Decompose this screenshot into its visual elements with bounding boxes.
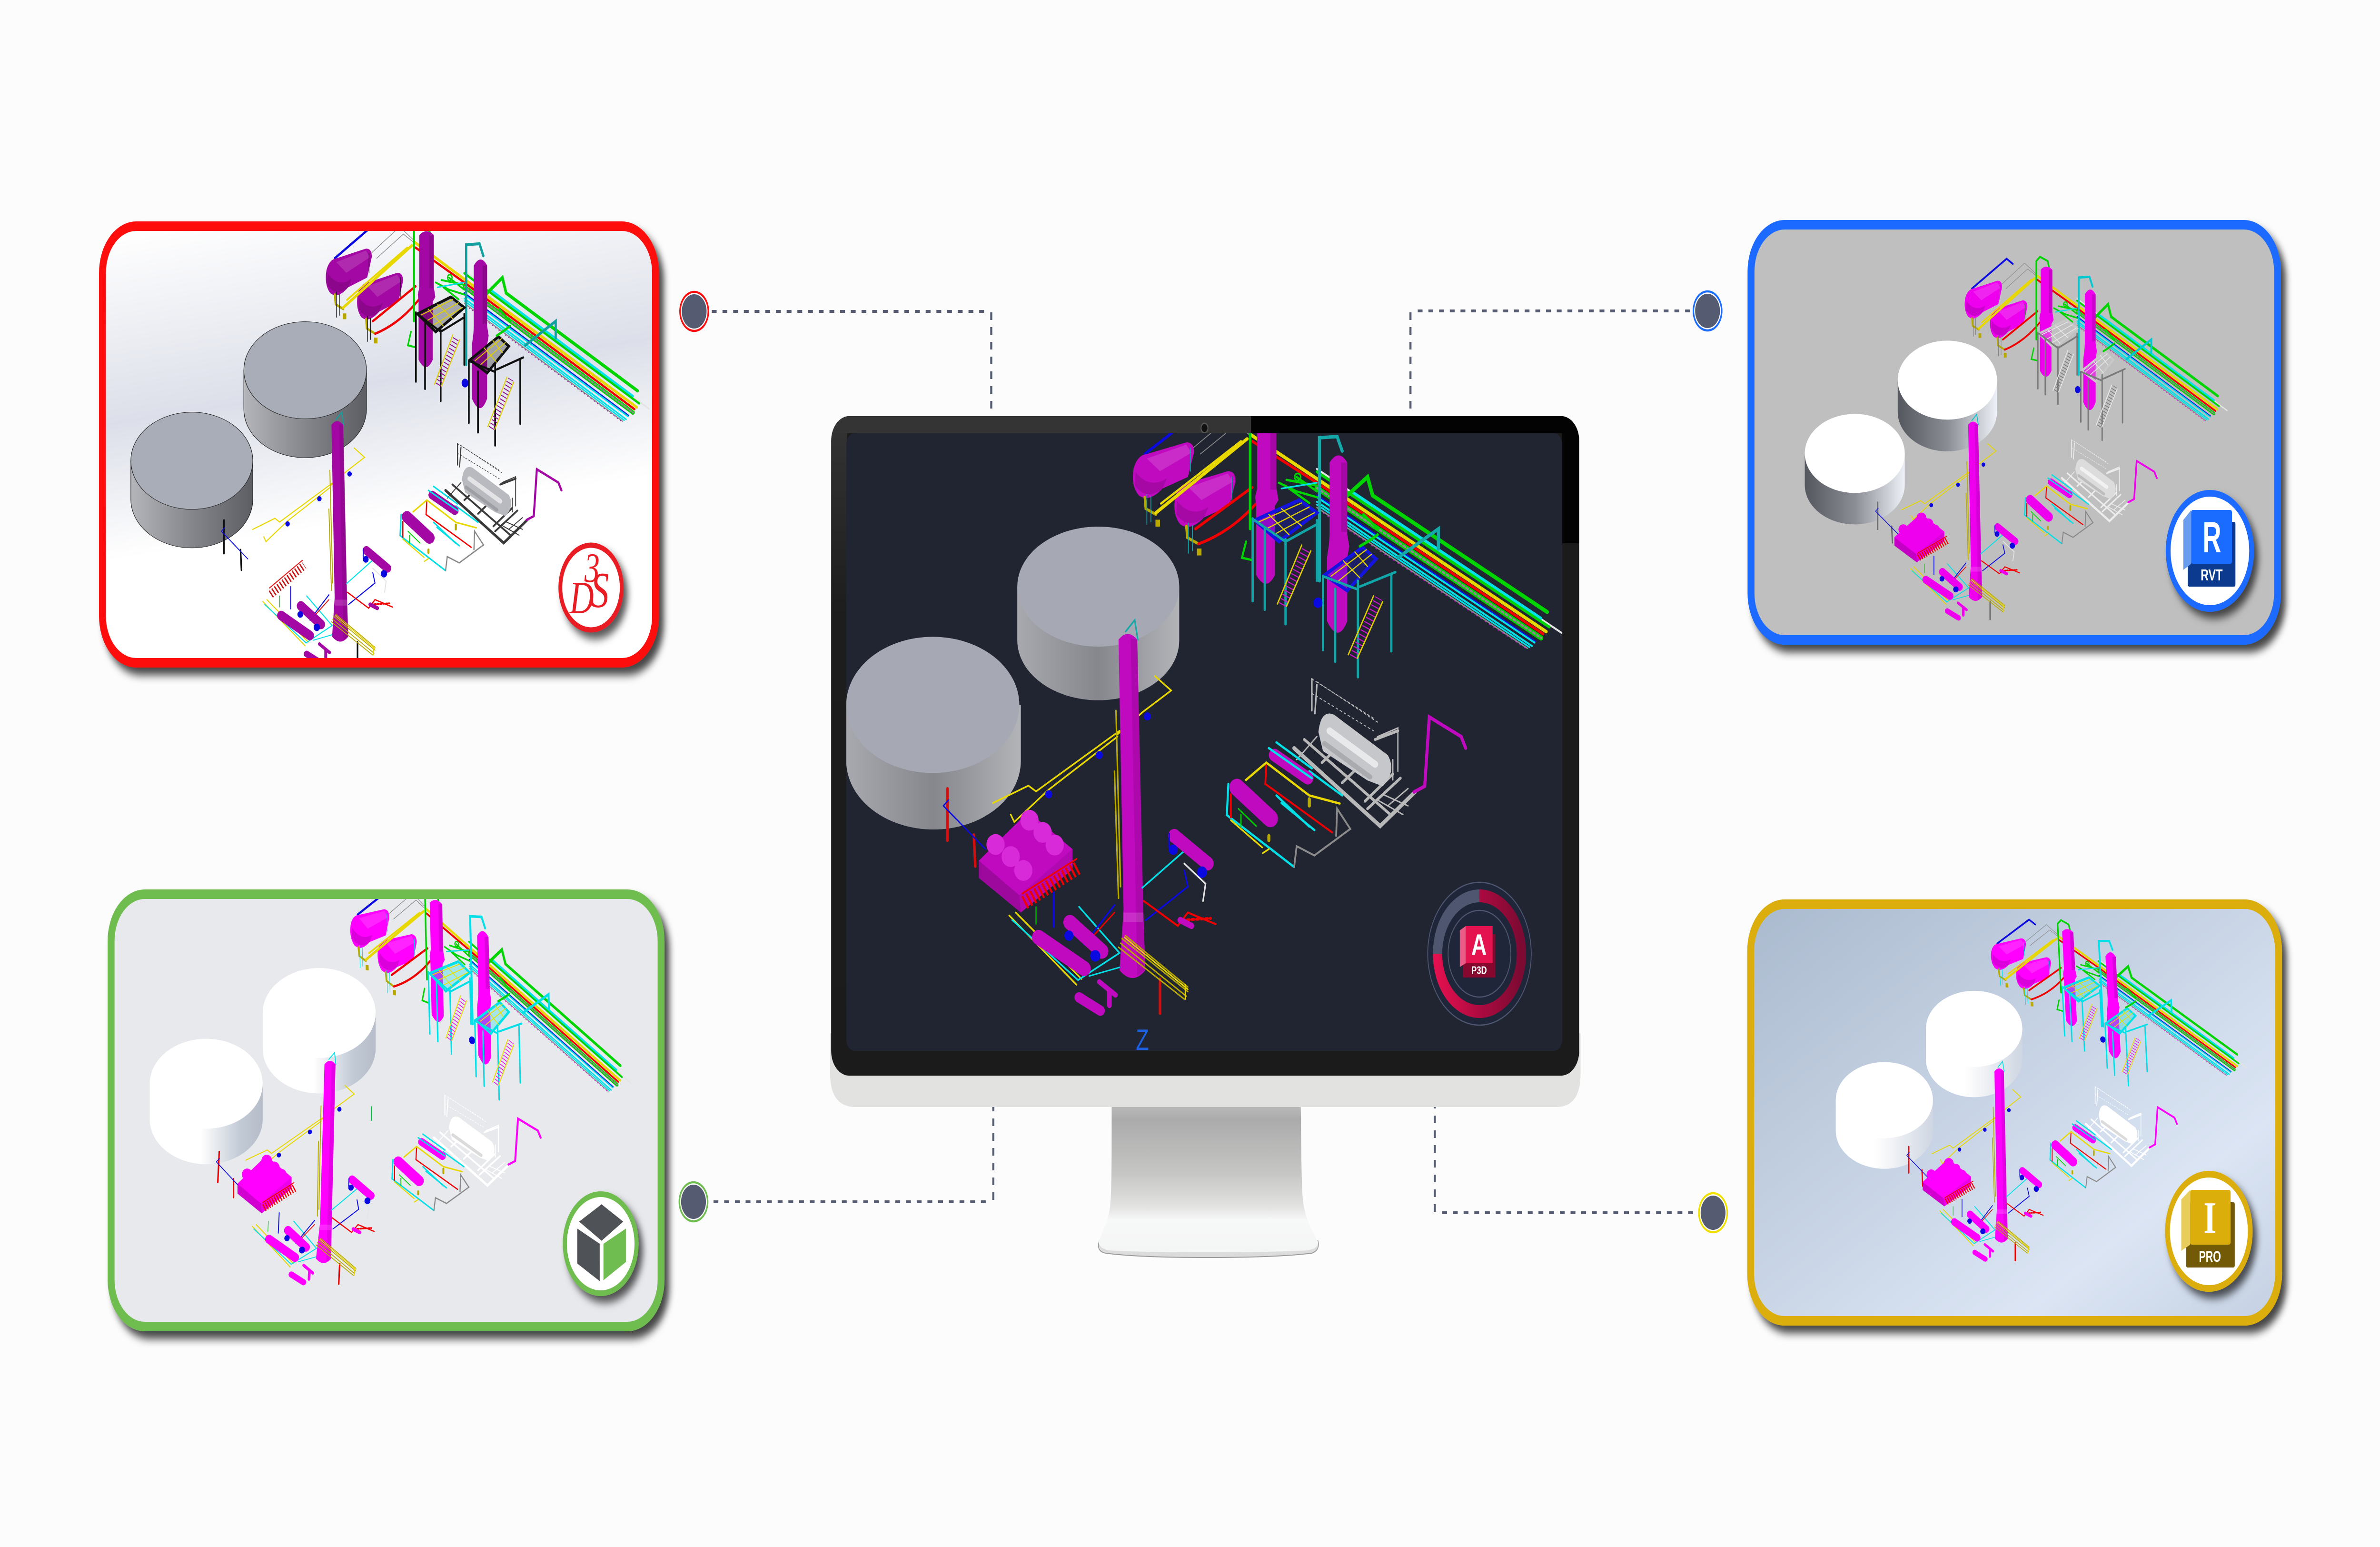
monitor bezel: [831, 416, 1579, 1076]
panel: Inventor model (gold): [1751, 904, 2279, 1321]
Revit RVT badge: [2168, 493, 2251, 609]
connector: Navisworks to monitor: [714, 1105, 993, 1202]
connector: Inventor to monitor: [1435, 1105, 1693, 1213]
columns and pipe rack: [1965, 257, 2227, 440]
panel: Revit model (blue): [1751, 225, 2278, 640]
axis triad: [371, 1106, 372, 1121]
vessel skid: [400, 444, 562, 571]
SolidWorks 3DS badge: [560, 545, 622, 630]
panel: Navisworks-style viewer model (green): [111, 878, 661, 1327]
stack and piping: [221, 412, 393, 664]
columns and pipe rack: [1989, 915, 2248, 1094]
SolidWorks 3DS badge: S: [591, 563, 609, 619]
storage tank 1: [150, 1039, 263, 1164]
connector: Revit to monitor: [1410, 311, 1690, 415]
vessel skid: [2024, 440, 2157, 544]
monitor: [830, 407, 1581, 1258]
boiler block: [979, 810, 1079, 913]
Revit RVT badge: RVT: [2201, 567, 2223, 584]
storage tank 2: [1017, 527, 1179, 700]
cube badge: [565, 1194, 636, 1293]
monitor stand: [1099, 1105, 1319, 1258]
axis label Z: Z: [1136, 1024, 1149, 1057]
stack and piping: [943, 620, 1216, 1014]
vessel skid: [392, 1095, 541, 1210]
node: yellow: [1699, 1193, 1727, 1232]
storage tank 1: [846, 637, 1021, 829]
panel: SolidWorks model (red): [102, 219, 655, 664]
monitor chin: [830, 1033, 1581, 1107]
SolidWorks 3DS badge: D: [569, 573, 594, 624]
vessel skid: [2050, 1087, 2177, 1188]
node: blue: [1694, 291, 1722, 330]
node: green: [679, 1182, 708, 1221]
Plant 3D model on screen: [846, 407, 1562, 1014]
stack and piping: [1875, 414, 2020, 619]
stack and piping: [211, 1053, 382, 1284]
Inventor PRO badge: [2167, 1174, 2250, 1288]
Plant 3D badge: A: [1471, 929, 1487, 961]
node: red: [680, 292, 708, 331]
storage tank 2: [1926, 991, 2023, 1097]
storage tank 2: [244, 322, 367, 458]
stack and piping: [1907, 1061, 2043, 1260]
connector: SolidWorks to monitor: [712, 311, 991, 415]
storage tank 1: [1805, 414, 1905, 524]
boiler block: [238, 1155, 296, 1213]
Plant 3D badge: P3D: [1471, 965, 1487, 977]
boiler block: [1894, 512, 1948, 562]
columns and pipe rack: [326, 219, 649, 446]
Plant 3D badge: [1428, 882, 1531, 1025]
red header: [269, 560, 304, 595]
Inventor PRO badge: I: [2203, 1193, 2216, 1243]
Inventor PRO badge: PRO: [2199, 1248, 2221, 1265]
vessel skid: [1227, 679, 1466, 867]
columns and pipe rack: [349, 878, 631, 1116]
storage tank 2: [263, 968, 376, 1093]
columns and pipe rack: [1133, 407, 1562, 677]
monitor screen: [846, 433, 1562, 1051]
storage tank 2: [1898, 340, 1997, 451]
Revit RVT badge: R: [2202, 513, 2221, 562]
boiler block: [1923, 1158, 1974, 1207]
SolidWorks 3DS badge: 3: [584, 545, 600, 591]
storage tank 1: [1836, 1062, 1933, 1169]
storage tank 1: [131, 412, 253, 548]
